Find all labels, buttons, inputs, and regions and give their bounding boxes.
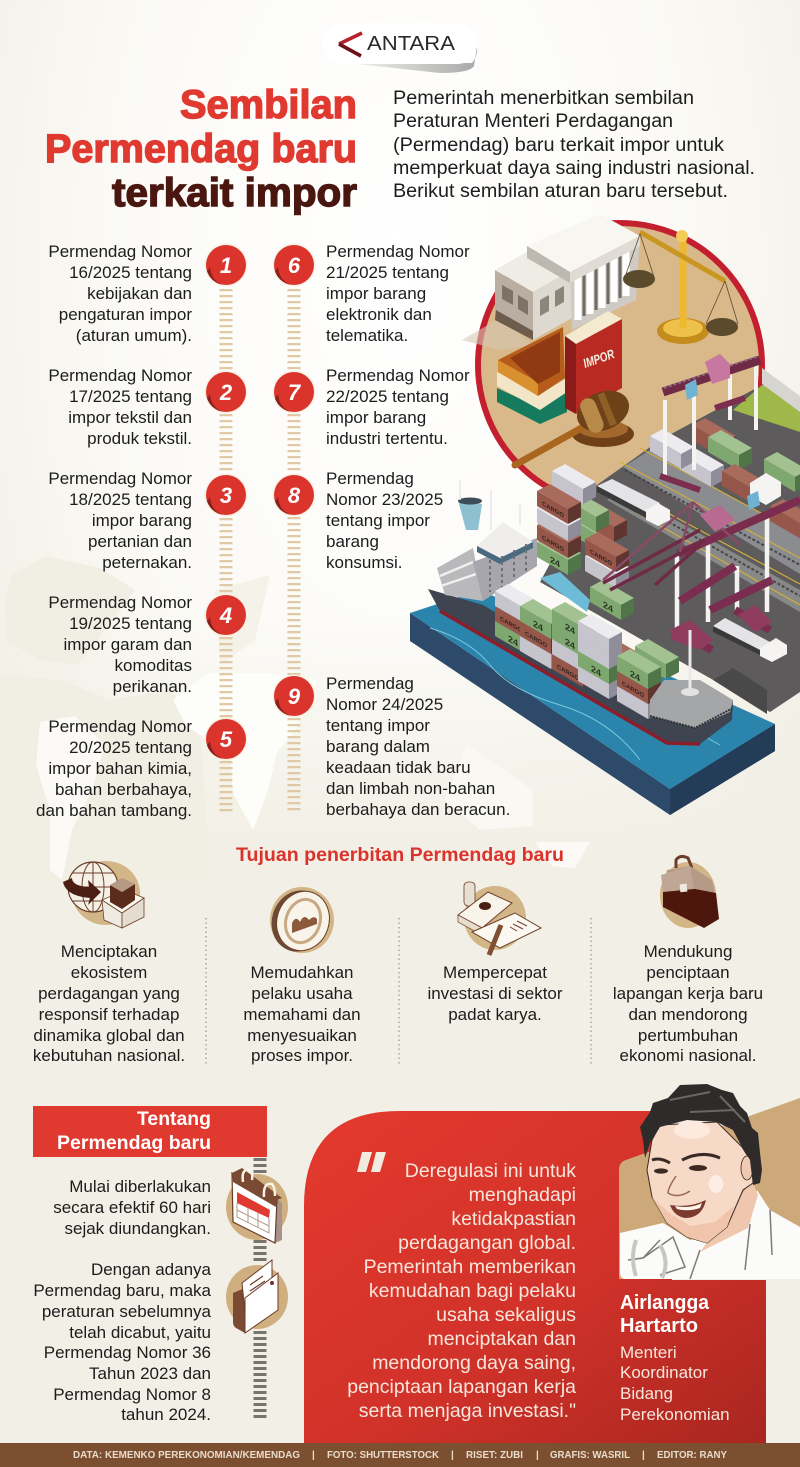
ship cargo containers: 24 (565, 637, 576, 653)
speaker role: Koordinator (620, 1363, 708, 1382)
heading bar: Permendag baru (57, 1133, 211, 1154)
text about validity (53, 1177, 211, 1238)
footer credits: | (312, 1450, 315, 1461)
regulation 2: 17/2025 tentang (69, 387, 192, 406)
badge 6 (272, 244, 316, 286)
regulation 2: impor tekstil dan (68, 408, 192, 427)
regulation 6: telematika. (326, 326, 408, 345)
badge 7: 7 (288, 380, 302, 405)
goal text 2: Memudahkan (250, 963, 354, 982)
badge 9 (272, 674, 316, 718)
badge 7 (272, 370, 316, 414)
badge 5: 5 (220, 727, 233, 752)
regulation 7: 22/2025 tentang (326, 387, 449, 406)
intro text: Pemerintah menerbitkan sembilan (393, 88, 694, 109)
red circle backdrop (478, 223, 762, 507)
water slab (410, 590, 775, 815)
truck lower (713, 618, 787, 662)
regulation 5 (36, 717, 192, 820)
goal text 1: dinamika global dan (33, 1026, 185, 1045)
text about revoked rules: peraturan sebelumnya (42, 1302, 212, 1321)
goal text 3 (427, 963, 563, 1024)
footer credits: GRAFIS: WASRIL (550, 1450, 630, 1461)
goal text 2: proses impor. (251, 1046, 353, 1065)
regulation 2: produk tekstil. (87, 429, 192, 448)
regulation 3: pertanian dan (88, 532, 192, 551)
regulation 7 (326, 366, 470, 448)
icon: red law book (565, 311, 622, 414)
goal text 3: investasi di sektor (427, 984, 563, 1003)
footer credits: | (451, 1450, 454, 1461)
goal text 4: lapangan kerja baru (613, 984, 763, 1003)
dark ladder (254, 1158, 266, 1418)
badge 4: 4 (219, 603, 232, 628)
quote text (347, 1160, 576, 1422)
icon: gavel (515, 383, 635, 465)
title (45, 83, 357, 215)
text about revoked rules: Tahun 2023 dan (89, 1364, 211, 1383)
intro text: (Permendag) baru terkait impor untuk (393, 135, 725, 156)
intro text: Berikut sembilan aturan baru tersebut. (393, 181, 728, 202)
goal text 2: menyesuaikan (247, 1026, 357, 1045)
text about validity: sejak diundangkan. (64, 1219, 211, 1238)
icon: red law book: IMPOR (581, 346, 617, 371)
goal text 1: Menciptakan (61, 942, 157, 961)
text about revoked rules: Permendag Nomor 36 (44, 1343, 211, 1362)
title: terkait impor (112, 171, 357, 215)
regulation 6: 21/2025 tentang (326, 263, 449, 282)
regulation 8: Permendag (326, 469, 414, 488)
ship cargo containers: 24 (565, 622, 576, 638)
speaker name (620, 1292, 710, 1337)
badge 3: 3 (220, 483, 232, 508)
logo: Antara: ANTARA (367, 33, 456, 55)
regulation 5: bahan berbahaya, (55, 780, 192, 799)
regulation 9: barang dalam (326, 737, 430, 756)
regulation 4: impor garam dan (63, 635, 192, 654)
goal text 4: dan mendorong (628, 1005, 748, 1024)
ship hull (428, 589, 733, 744)
regulation 7: impor barang (326, 408, 426, 427)
intro text: memperkuat daya saing industri nasional. (393, 158, 755, 179)
speaker name: Airlangga (620, 1292, 710, 1314)
regulation 8: barang (326, 532, 379, 551)
speaker role (620, 1343, 730, 1424)
regulation 9: keadaan tidak baru (326, 758, 471, 777)
regulation 1: Permendag Nomor (48, 242, 192, 261)
regulation 4: Permendag Nomor (48, 593, 192, 612)
truck upper (597, 479, 670, 526)
badge 1 (204, 244, 248, 286)
ship cargo containers: 24 (630, 669, 641, 685)
ship cargo containers (495, 584, 679, 719)
footer credits: EDITOR: RANY (657, 1450, 727, 1461)
text about revoked rules: Dengan adanya (91, 1260, 212, 1279)
footer credits: | (536, 1450, 539, 1461)
stacked containers on quay: CARGO (542, 500, 564, 520)
regulation 6: impor barang (326, 284, 426, 303)
footer credits: RISET: ZUBI (466, 1450, 523, 1461)
regulation 6 (326, 242, 470, 345)
regulation 3 (48, 469, 192, 572)
regulation 1: 16/2025 tentang (69, 263, 192, 282)
quote text: perdagangan global. (398, 1232, 576, 1254)
regulation 4: perikanan. (113, 677, 192, 696)
timeline ladders (226, 289, 294, 815)
goal text 2 (243, 963, 361, 1065)
regulation 4: 19/2025 tentang (69, 614, 192, 633)
regulation 5: 20/2025 tentang (69, 738, 192, 757)
speaker role: Perekonomian (620, 1405, 730, 1424)
goal text 1: kebutuhan nasional. (33, 1046, 185, 1065)
stacked containers on quay: CARGO (542, 534, 564, 554)
regulation 4: komoditas (115, 656, 192, 675)
regulation 2 (48, 366, 192, 448)
stacked containers on quay (537, 464, 629, 589)
regulation 9 (326, 674, 510, 819)
quote text: usaha sekaligus (436, 1304, 576, 1326)
footer credits (0, 1443, 800, 1467)
dotted separators (206, 918, 591, 1064)
goal text 4: penciptaan (646, 963, 730, 982)
icon: stacked books (497, 327, 567, 424)
badge 2 (204, 370, 248, 414)
ship cargo containers: CARGO (525, 630, 547, 650)
quote mark (357, 1152, 386, 1172)
title: Permendag baru (45, 127, 357, 171)
regulation 9: berbahaya dan beracun. (326, 800, 510, 819)
stacked containers on quay: CARGO (590, 548, 612, 568)
quote text: ketidakpastian (451, 1208, 576, 1230)
regulation 3: Permendag Nomor (48, 469, 192, 488)
regulation 7: industri tertentu. (326, 429, 448, 448)
goal text 1: perdagangan yang (38, 984, 180, 1003)
regulation 8: konsumsi. (326, 553, 403, 572)
regulation 8: tentang impor (326, 511, 430, 530)
icon: money and documents (458, 882, 541, 955)
badge 6: 6 (288, 253, 301, 278)
badge 2: 2 (219, 380, 233, 405)
badge 1: 1 (220, 253, 232, 278)
goal text 4: Mendukung (644, 942, 732, 961)
intro text: Peraturan Menteri Perdagangan (393, 111, 673, 132)
goal text 4 (613, 942, 763, 1065)
ship superstructure (437, 480, 537, 601)
regulation 4 (48, 593, 192, 696)
lower gantry crane: 24 (603, 600, 614, 616)
text about revoked rules: tahun 2024. (121, 1405, 211, 1424)
ship cargo containers: 24 (591, 664, 602, 680)
badge 4 (204, 594, 248, 636)
goal text 3: Mempercepat (443, 963, 547, 982)
icon: balance scales (623, 230, 738, 344)
regulation 5: impor bahan kimia, (48, 759, 192, 778)
upper gantry crane (650, 354, 800, 504)
icon: ring with people (264, 883, 337, 959)
title: Sembilan (180, 83, 357, 127)
footer credits: FOTO: SHUTTERSTOCK (327, 1450, 440, 1461)
panel: about Permendag (33, 1106, 288, 1424)
icon: government buildings (462, 214, 640, 350)
ship cargo containers: 24 (508, 634, 519, 650)
badge 3 (204, 474, 248, 516)
ship cargo containers: 24 (533, 619, 544, 635)
goal text 1: ekosistem (71, 963, 147, 982)
regulation 6: elektronik dan (326, 305, 432, 324)
heading bar (33, 1106, 267, 1157)
ship cargo containers: CARGO (557, 663, 579, 683)
left regulation list (36, 242, 192, 820)
badge 8: 8 (288, 483, 301, 508)
regulation 3: peternakan. (102, 553, 192, 572)
footer credits: | (642, 1450, 645, 1461)
regulation 9: Permendag (326, 674, 414, 693)
regulation 3: impor barang (92, 511, 192, 530)
regulation 1: pengaturan impor (59, 305, 192, 324)
quote text: kemudahan bagi pelaku (369, 1280, 576, 1302)
regulation 1: (aturan umum). (76, 326, 192, 345)
footer credits: DATA: KEMENKO PEREKONOMIAN/KEMENDAG (73, 1450, 300, 1461)
speaker role: Menteri (620, 1343, 677, 1362)
speaker role: Bidang (620, 1384, 673, 1403)
regulation 9: Nomor 24/2025 (326, 695, 443, 714)
goal text 2: memahami dan (243, 1005, 361, 1024)
logo: Antara (323, 23, 477, 73)
goal text 3: padat karya. (448, 1005, 542, 1024)
goal text 4: ekonomi nasional. (619, 1046, 757, 1065)
stacked containers on quay: 24 (550, 555, 561, 571)
regulation 7: Permendag Nomor (326, 366, 470, 385)
quote text: Deregulasi ini untuk (405, 1160, 576, 1182)
text about validity: Mulai diberlakukan (69, 1177, 211, 1196)
section heading: goals: Tujuan penerbitan Permendag baru (236, 845, 564, 866)
ship cargo containers: CARGO (622, 680, 644, 700)
icon: globe and boxes (63, 861, 144, 928)
number badges (204, 244, 316, 760)
quote text: penciptaan lapangan kerja (347, 1376, 576, 1398)
regulation 1: kebijakan dan (87, 284, 192, 303)
quote text: Pemerintah memberikan (364, 1256, 576, 1278)
regulation 8: Nomor 23/2025 (326, 490, 443, 509)
port ground (540, 368, 800, 714)
right regulation list (326, 242, 510, 819)
icon: folder (226, 1260, 288, 1333)
speaker name: Hartarto (620, 1315, 698, 1337)
badge 5 (204, 718, 248, 760)
regulation 5: dan bahan tambang. (36, 801, 192, 820)
regulation 5: Permendag Nomor (48, 717, 192, 736)
lower gantry crane (590, 473, 800, 650)
illustration: law circle (462, 214, 762, 507)
portrait: Airlangga Hartarto (619, 1084, 800, 1279)
heading bar: Tentang (137, 1109, 211, 1130)
quote text: serta menjaga investasi." (359, 1400, 576, 1422)
badge 9: 9 (288, 684, 301, 709)
icon: briefcase (660, 856, 719, 928)
goal text 2: pelaku usaha (251, 984, 353, 1003)
badge 8 (272, 474, 316, 516)
quote text: menghadapi (469, 1184, 576, 1206)
world map background (0, 556, 590, 880)
ship cargo containers: CARGO (500, 615, 522, 635)
goal text 4: pertumbuhan (638, 1026, 738, 1045)
quote text: mendorong daya saing, (372, 1352, 576, 1374)
container ship (428, 480, 733, 744)
quote text: menciptakan dan (427, 1328, 576, 1350)
regulation 6: Permendag Nomor (326, 242, 470, 261)
text about revoked rules (33, 1260, 212, 1424)
regulation 9: dan limbah non-bahan (326, 779, 495, 798)
goal text 1 (33, 942, 185, 1065)
goal text 1: responsif terhadap (39, 1005, 179, 1024)
regulation 2: Permendag Nomor (48, 366, 192, 385)
regulation 1 (48, 242, 192, 345)
regulation 3: 18/2025 tentang (69, 490, 192, 509)
regulation 9: tentang impor (326, 716, 430, 735)
text about validity: secara efektif 60 hari (53, 1198, 211, 1217)
regulation 8 (326, 469, 443, 572)
text about revoked rules: Permendag baru, maka (33, 1281, 212, 1300)
icon: calendar (226, 1168, 288, 1243)
panel: quote (304, 1111, 766, 1443)
intro text (393, 88, 755, 202)
text about revoked rules: telah dicabut, yaitu (69, 1323, 211, 1342)
illustration: port and ship (410, 354, 800, 815)
text about revoked rules: Permendag Nomor 8 (53, 1385, 211, 1404)
ship bow deck (650, 630, 733, 728)
